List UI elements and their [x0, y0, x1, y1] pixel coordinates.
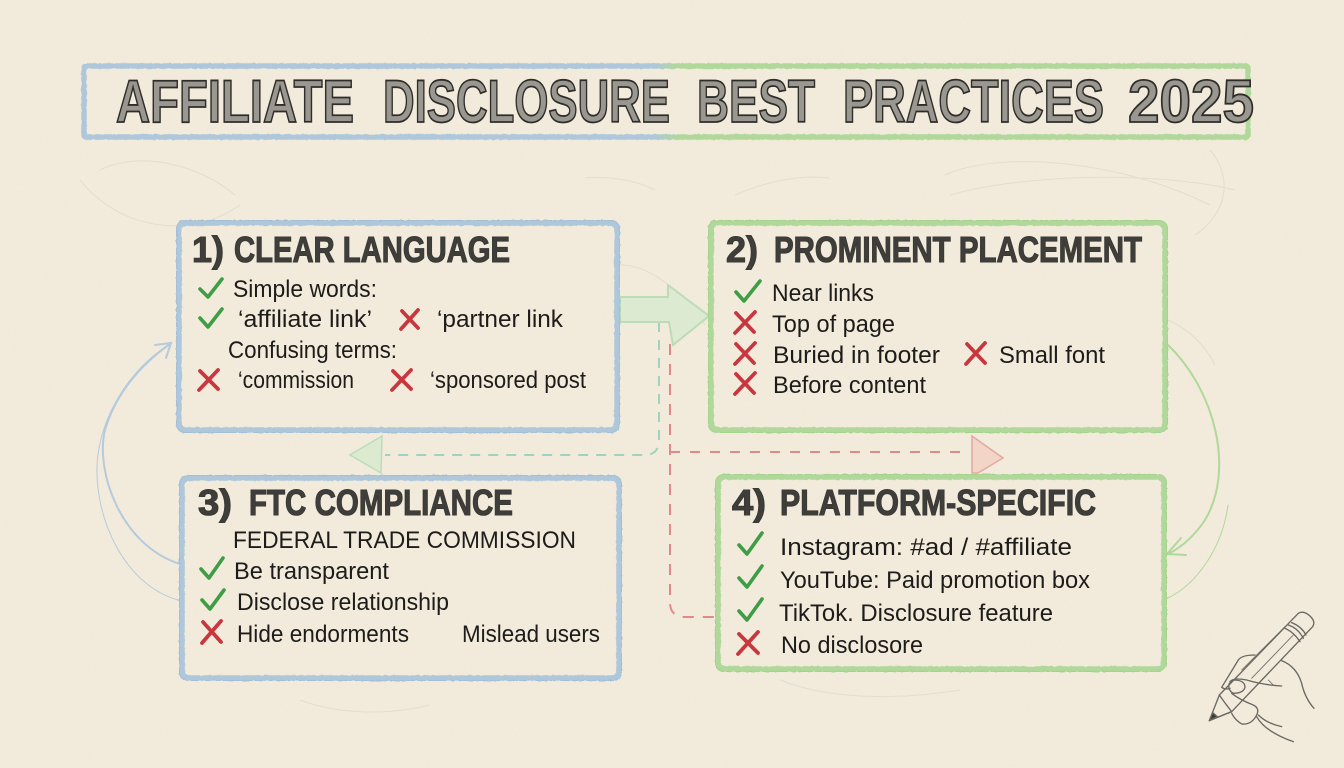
row: commission and sponsored post: ‘sponsored post [430, 367, 586, 394]
arrow: block arrow from Clear Language to Prominent Placement [620, 285, 709, 345]
title text: DISCLOSURE [383, 68, 670, 135]
row: hide endorments and mislead users: Hide endorments [237, 621, 409, 648]
heading: clear language: 1) [192, 229, 224, 270]
row: affiliate link and partner link [200, 306, 564, 333]
title text [116, 68, 1254, 135]
row: instagram: Instagram: #ad / #affiliate [780, 534, 1072, 561]
title text: 2025 [1128, 68, 1254, 135]
heading: platform-specific: PLATFORM-SPECIFIC [780, 482, 1096, 523]
row: near links: Near links [772, 280, 874, 307]
heading: clear language: CLEAR LANGUAGE [234, 229, 510, 270]
row: buried in footer and small font: Buried in footer [773, 342, 940, 369]
row: commission and sponsored post: ‘commission [238, 367, 354, 394]
faint background sketch lines [80, 150, 1235, 712]
row: be transparent: Be transparent [234, 558, 389, 585]
subheading: federal trade commission: FEDERAL TRADE COMMISSION [233, 527, 576, 554]
row: affiliate link and partner link: ‘partner link [437, 306, 564, 333]
panel: ftc compliance [180, 476, 622, 680]
title frame [84, 66, 1248, 137]
panel frame 2 [708, 220, 1168, 432]
heading: prominent placement: PROMINENT PLACEMENT [774, 229, 1142, 270]
title banner [84, 66, 1254, 137]
panel frame 4 [716, 474, 1166, 672]
row: no disclosure: No disclosore [781, 632, 923, 659]
row: commission and sponsored post [199, 367, 586, 394]
row: youtube: YouTube: Paid promotion box [780, 567, 1090, 594]
icon: hand holding pencil [1209, 612, 1314, 742]
arrow: loop from FTC Compliance up to Clear Language [97, 343, 180, 600]
panel: platform-specific [716, 474, 1166, 672]
row: simple words: Simple words: [233, 276, 377, 303]
arrow: loop from Prominent Placement down to Platform-Specific [1167, 345, 1228, 598]
row: disclose relationship: Disclose relationship [237, 589, 449, 616]
heading: prominent placement: 2) [726, 229, 758, 270]
heading: ftc compliance: FTC COMPLIANCE [249, 482, 513, 523]
row: tiktok: TikTok. Disclosure feature [779, 600, 1053, 627]
row: top of page: Top of page [772, 311, 895, 338]
row: buried in footer and small font [735, 342, 1105, 369]
title text: PRACTICES [843, 68, 1104, 135]
heading: platform-specific: 4) [732, 482, 766, 523]
heading: ftc compliance: 3) [198, 482, 232, 523]
panel: prominent placement [708, 220, 1168, 432]
panel frame 1 [176, 220, 620, 432]
arrow: red dashed path to Platform-Specific [670, 344, 1003, 617]
panel: clear language [176, 220, 620, 432]
row: before content: Before content [773, 372, 926, 399]
title text: AFFILIATE [116, 68, 354, 135]
row: hide endorments and mislead users [202, 621, 600, 648]
panel frame 3 [180, 476, 622, 680]
row: hide endorments and mislead users: Mislead users [462, 621, 600, 648]
row: affiliate link and partner link: ‘affiliate link’ [238, 306, 372, 333]
row: buried in footer and small font: Small font [999, 342, 1105, 369]
title text: BEST [697, 68, 815, 135]
row: confusing terms: Confusing terms: [228, 337, 397, 364]
arrow: green dashed path to FTC Compliance [350, 322, 659, 473]
